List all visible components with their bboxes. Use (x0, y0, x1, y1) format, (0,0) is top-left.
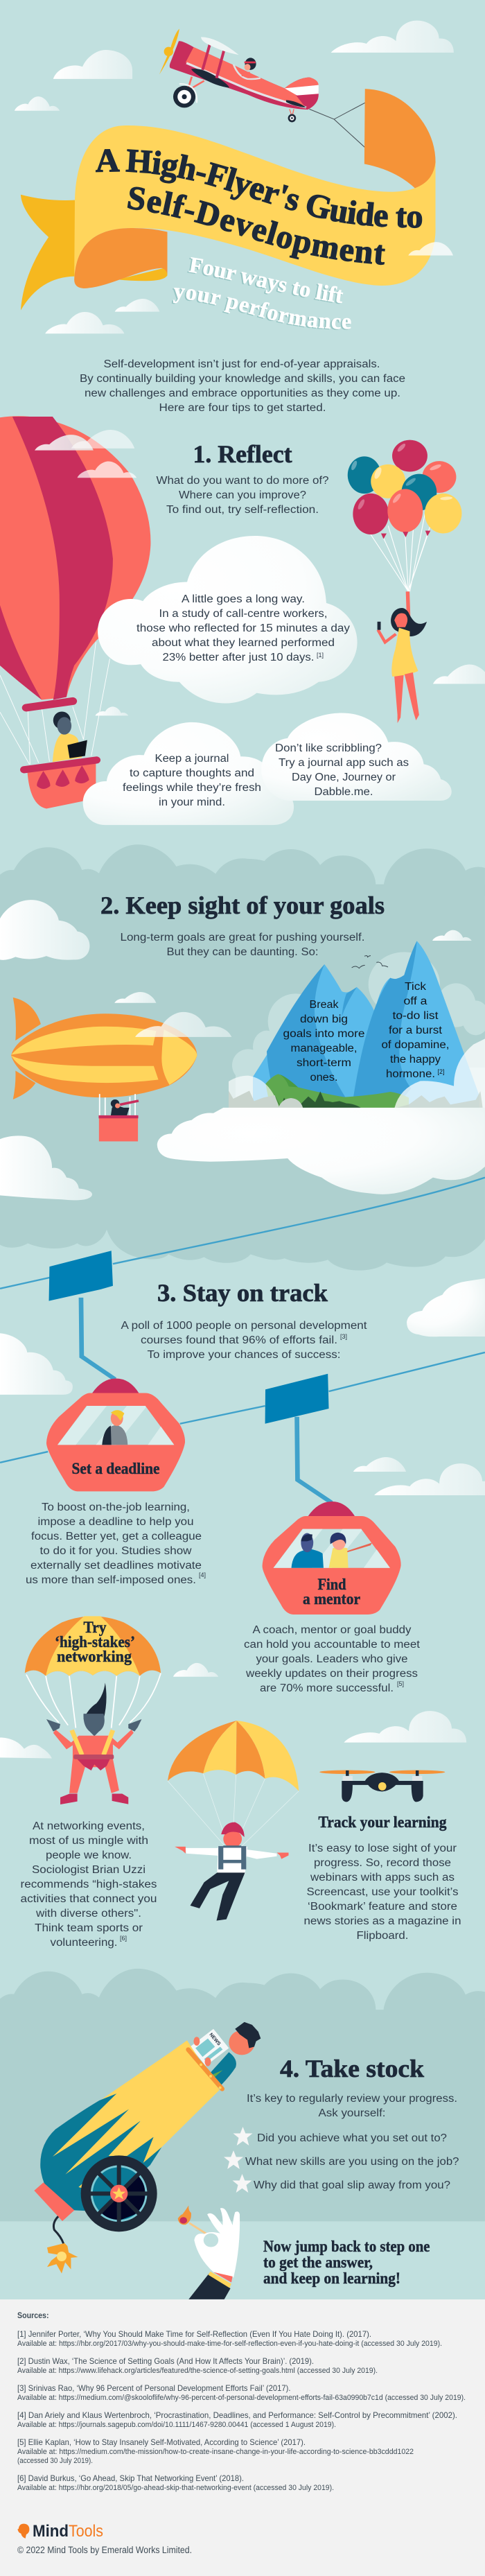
cloud on balloon lower (78, 461, 136, 478)
closing message: and keep on learning! (263, 2270, 400, 2287)
copyright: © 2022 Mind Tools by Emerald Works Limited. (17, 2545, 192, 2555)
heading: 1. Reflect: 1. Reflect (193, 440, 292, 468)
text: mentor: A coach, mentor or goal buddy (252, 1624, 412, 1636)
text: networking (21, 1820, 157, 1949)
text: deadline: focus. Better yet, get a colleague (31, 1531, 202, 1542)
cloud on balloon left (35, 435, 94, 451)
MindTools logo: Mind (33, 2522, 69, 2541)
heading: 2. Keep sight of your goals: 2. Keep sight of your goals (100, 891, 385, 919)
intro text: new challenges and embrace opportunities as they come up. (85, 388, 400, 399)
text: track: progress. So, record those (314, 1857, 451, 1869)
banner back fold (364, 89, 436, 189)
cloud top right (331, 21, 454, 53)
parachutist (168, 1721, 299, 1921)
cables (0, 1352, 485, 1463)
label: high-stakes networking: Try (83, 1619, 107, 1636)
heading: 3. Stay on track: 3. Stay on track (157, 1279, 328, 1307)
section 4 darker cloud band (0, 1969, 485, 2221)
text: goals intro: Long-term goals are great for pushing yourself. (121, 932, 364, 943)
cloud top right (344, 1711, 466, 1743)
text cloud: journal (83, 722, 294, 825)
cloud over banner (408, 242, 453, 256)
banner tail (21, 195, 75, 311)
text: study cloud: [1] (317, 652, 324, 659)
cloud lower (45, 312, 124, 333)
panel: 1 reflect artwork (0, 416, 485, 825)
panel: 3 stay on track artwork (0, 1278, 485, 1728)
cloud small mid (173, 1663, 218, 1677)
text: mentor: can hold you accountable to meet (244, 1639, 421, 1651)
intro text: Self-development isn’t just for end-of-year appraisals. (104, 358, 380, 370)
text: networking: Sociologist Brian Uzzi (32, 1864, 146, 1876)
label: find a mentor (303, 1576, 360, 1608)
title: A High-Flyer's Guide to (96, 149, 423, 229)
text: poll: courses found that 96% of efforts fail. (141, 1334, 337, 1346)
text: take stock intro: Ask yourself: (319, 2107, 385, 2119)
cloud left (0, 1737, 52, 1759)
intro text: Here are four tips to get started. (159, 402, 326, 414)
cable box one (49, 1251, 113, 1301)
white cloud under mountains (157, 1108, 485, 1194)
subtitle (172, 257, 351, 330)
text: left mountain (283, 999, 364, 1084)
text: right mountain: of dopamine, (381, 1039, 449, 1051)
subtitle: your performance (172, 288, 351, 330)
text: mentor (244, 1624, 421, 1694)
text: goals intro: But they can be daunting. So: (166, 946, 319, 958)
text: left mountain: down big (300, 1013, 348, 1025)
text: poll: [3] (340, 1333, 347, 1340)
panel: 2 goals artwork (0, 900, 485, 1301)
text: study cloud (136, 593, 350, 663)
cloud left (0, 1333, 73, 1395)
closing message (263, 2238, 430, 2287)
rope to banner (309, 103, 365, 148)
icon: spark centre (57, 2252, 67, 2261)
cable left (0, 1278, 49, 1289)
gondola: set a deadline (46, 1379, 185, 1491)
text: networking: with diverse others". (35, 1908, 141, 1920)
text cloud: app (261, 713, 452, 801)
text: networking: Think team sports or (35, 1922, 143, 1934)
text: right mountain: off a (403, 995, 427, 1007)
text: left mountain: Break (309, 999, 339, 1011)
footer panel (0, 2299, 485, 2576)
icon: mountains (229, 941, 485, 1108)
text: right mountain: [2] (438, 1068, 445, 1075)
text: track: Flipboard. (356, 1930, 409, 1942)
text: study cloud: A little goes a long way. (182, 593, 305, 605)
text: left mountain: goals into more (283, 1028, 364, 1040)
label: set a deadline: Set a deadline (72, 1460, 159, 1477)
title banner text (96, 149, 423, 330)
text: goals intro (121, 932, 364, 958)
intro text (80, 358, 405, 414)
hanger two (297, 1417, 332, 1503)
text: mentor: are 70% more successful. (260, 1682, 394, 1694)
text: networking: people we know. (46, 1850, 132, 1861)
text: right mountain: to-do list (392, 1010, 439, 1022)
text: app cloud (275, 742, 409, 798)
text: networking: activities that connect you (21, 1893, 157, 1905)
sources list: (accessed 30 July 2019). (17, 2457, 93, 2465)
sources list: Available at: https://medium.com/@skooloflife/why-96-percent-of-personal-development-efforts-fail-63a0990b7c1d (accessed 30 July 2019). (17, 2394, 466, 2402)
text: left mountain: manageable, (291, 1043, 358, 1054)
cable lower right (113, 1178, 485, 1264)
MindTools logo (17, 2522, 103, 2541)
text: app cloud: Dabble.me. (315, 786, 373, 798)
text: journal cloud: in your mind. (159, 797, 225, 808)
checklist with stars: Why did that goal slip away from you? (254, 2179, 450, 2191)
text: app cloud: Try a journal app such as (279, 757, 409, 769)
cloud lower small (115, 299, 159, 312)
banner gold fold (118, 268, 168, 281)
text: left mountain: short-term (297, 1057, 351, 1069)
text: networking: [6] (120, 1935, 127, 1942)
icon: parachute networking (25, 1616, 161, 1728)
sources list: [3] Srinivas Rao, ‘Why 96 Percent of Personal Development Efforts Fail’ (2017). (17, 2383, 291, 2393)
text: deadline: [4] (199, 1572, 206, 1578)
text: app cloud: Day One, Journey or (292, 772, 396, 783)
text: track: Screencast, use your toolkit’s (306, 1886, 459, 1898)
text: mentor: [5] (397, 1680, 404, 1687)
text: reflect intro: To find out, try self-reflection. (166, 504, 319, 516)
cloud small near basket (95, 706, 128, 715)
icon: cannon and person (191, 2022, 261, 2085)
sources list: [5] Ellie Kaplan, ‘How to Stay Insanely Self-Motivated, According to Science’ (2017). (17, 2437, 306, 2447)
label: find a mentor: a mentor (303, 1590, 360, 1608)
text: networking: volunteering. (50, 1937, 118, 1949)
text: deadline: us more than self-imposed ones. (26, 1574, 196, 1586)
icon: hand holding match (178, 2205, 240, 2299)
text: mentor: your goals. Leaders who give (256, 1653, 407, 1665)
intro text: By continually building your knowledge and skills, you can face (80, 373, 405, 385)
text: left mountain: ones. (310, 1072, 338, 1084)
label: high-stakes networking: ‘high-stakes’ (55, 1633, 135, 1651)
sources list: Available at: https://hbr.org/2018/05/go-ahead-skip-that-networking-event (accessed 30 July 2019). (17, 2484, 334, 2492)
icon: drone (319, 1770, 445, 1802)
sources heading: Sources: (17, 2310, 48, 2320)
text: poll (121, 1320, 367, 1361)
text: track (303, 1843, 461, 1942)
text: study cloud: those who reflected for 15 minutes a day (136, 623, 350, 634)
gondola: find a mentor (263, 1502, 401, 1615)
panel: 3 stay on track artwork lower (0, 1711, 466, 1921)
text: deadline: externally set deadlines motivate (30, 1560, 202, 1572)
icon: cannon (34, 2040, 222, 2244)
sources list: Available at: https://www.lifehack.org/articles/featured/the-science-of-setting-goals.html (accessed 30 July 2019). (17, 2367, 378, 2375)
text cloud: study (98, 536, 358, 704)
text: networking: At networking events, (33, 1820, 145, 1832)
cloud small above blimp (114, 992, 156, 1003)
icon: balloons and girl (348, 440, 461, 723)
cloud left large (0, 900, 89, 960)
sources list: Available at: https://journals.sagepub.com/doi/10.1111/1467-9280.00441 (accessed 1 August 2019). (17, 2421, 336, 2429)
text: study cloud: In a study of call-centre workers, (159, 608, 327, 620)
label: high-stakes networking: networking (57, 1648, 132, 1665)
cloud small left (15, 96, 60, 111)
title banner text: Self-Development (127, 187, 385, 265)
sources list: Available at: https://hbr.org/2017/03/why-you-should-make-time-for-self-reflection-even-if-you-hate-doing-it (accessed 30 July 2019). (17, 2340, 442, 2348)
label: high-stakes networking (55, 1619, 135, 1665)
sources list: [4] Dan Ariely and Klaus Wertenbroch, ‘Procrastination, Deadlines, and Performance: Self-Control by Precommitment’ (2002). (17, 2410, 457, 2420)
text: track: It’s easy to lose sight of your (308, 1843, 457, 1854)
cloud small right (432, 930, 472, 941)
text: poll: To improve your chances of success: (147, 1349, 341, 1361)
text: deadline: impose a deadline to help you (37, 1516, 194, 1528)
text: take stock intro (247, 2093, 457, 2119)
label: track your learning: Track your learning (319, 1813, 447, 1831)
text: right mountain: the happy (390, 1054, 441, 1065)
text: journal cloud: feelings while they’re fresh (123, 782, 261, 794)
text: deadline (26, 1502, 206, 1586)
hanger one (81, 1298, 115, 1380)
heading: 4. Take stock: 4. Take stock (280, 2055, 424, 2082)
icon: bomb spark (47, 2243, 78, 2274)
text: track: webinars with apps such as (310, 1872, 455, 1883)
cloud on balloon right (71, 430, 134, 449)
text: news label: NEWS (208, 2033, 222, 2047)
text: poll: A poll of 1000 people on personal development (121, 1320, 367, 1332)
subtitle: Four ways to lift (187, 257, 344, 304)
sources list: Available at: https://medium.com/the-mission/how-to-create-insane-change-in-your-life-according-to-science-bb3cddd1022 (17, 2448, 414, 2456)
skydiver (46, 1714, 141, 1804)
text: right mountain: for a burst (389, 1025, 443, 1036)
cloud over airship (135, 1012, 231, 1037)
icon: hot air balloon (0, 416, 150, 808)
icon: biplane (159, 29, 319, 122)
text: networking: most of us mingle with (29, 1835, 148, 1847)
icon: airship (11, 998, 197, 1141)
checklist with stars: Did you achieve what you set out to? (257, 2132, 447, 2144)
text: reflect intro (157, 475, 329, 516)
cloud lower left (0, 1135, 92, 1200)
cable box two (265, 1374, 329, 1424)
text: right mountain (381, 981, 449, 1080)
cloud small right (353, 1457, 406, 1472)
closing message: to get the answer, (263, 2254, 373, 2271)
sources list: [1] Jennifer Porter, ‘Why You Should Make Time for Self-Reflection (Even If You Hate Doing It). (2017). (17, 2329, 371, 2339)
text: deadline: to do it for you. Studies show (40, 1545, 192, 1557)
closing message: Now jump back to step one (263, 2238, 430, 2255)
sources list: [2] Dustin Wax, ‘The Science of Setting Goals (And How It Affects Your Brain)’. (2019). (17, 2356, 314, 2366)
checklist with stars: What new skills are you using on the job? (245, 2156, 459, 2168)
text: networking: recommends “high-stakes (21, 1879, 157, 1890)
text: app cloud: Don’t like scribbling? (275, 742, 382, 754)
cloud right edge (433, 664, 485, 684)
label: find a mentor: Find (317, 1576, 346, 1593)
text: study cloud: about what they learned performed (152, 637, 335, 649)
text: journal cloud: Keep a journal (155, 753, 229, 765)
text: mentor: weekly updates on their progress (245, 1668, 418, 1680)
section 2 darker cloud band (0, 844, 485, 1271)
text: take stock intro: It’s key to regularly review your progress. (247, 2093, 457, 2105)
text: journal cloud: to capture thoughts and (130, 767, 254, 779)
text: study cloud: 23% better after just 10 days. (162, 652, 315, 663)
cloud right (374, 1463, 485, 1495)
cloud top right (407, 1278, 485, 1337)
text: reflect intro: What do you want to do more of? (157, 475, 329, 487)
text: right mountain: Tick (405, 981, 426, 993)
banner front fold (74, 228, 168, 288)
cloud left (53, 50, 132, 79)
text: deadline: To boost on-the-job learning, (42, 1502, 190, 1513)
text: track: news stories as a magazine in (303, 1915, 461, 1927)
banner main ribbon (74, 125, 436, 286)
sources list: [6] David Burkus, ‘Go Ahead, Skip That Networking Event’ (2018). (17, 2473, 244, 2483)
panel: header artwork (15, 21, 454, 333)
text: reflect intro: Where can you improve? (179, 489, 306, 501)
sources list (17, 2329, 466, 2492)
text: track: ‘Bookmark’ feature and store (308, 1901, 457, 1913)
text: journal cloud (123, 753, 261, 808)
checklist with stars (224, 2127, 459, 2193)
MindTools logo: Tools (69, 2522, 103, 2541)
text: right mountain: hormone. (386, 1068, 435, 1080)
